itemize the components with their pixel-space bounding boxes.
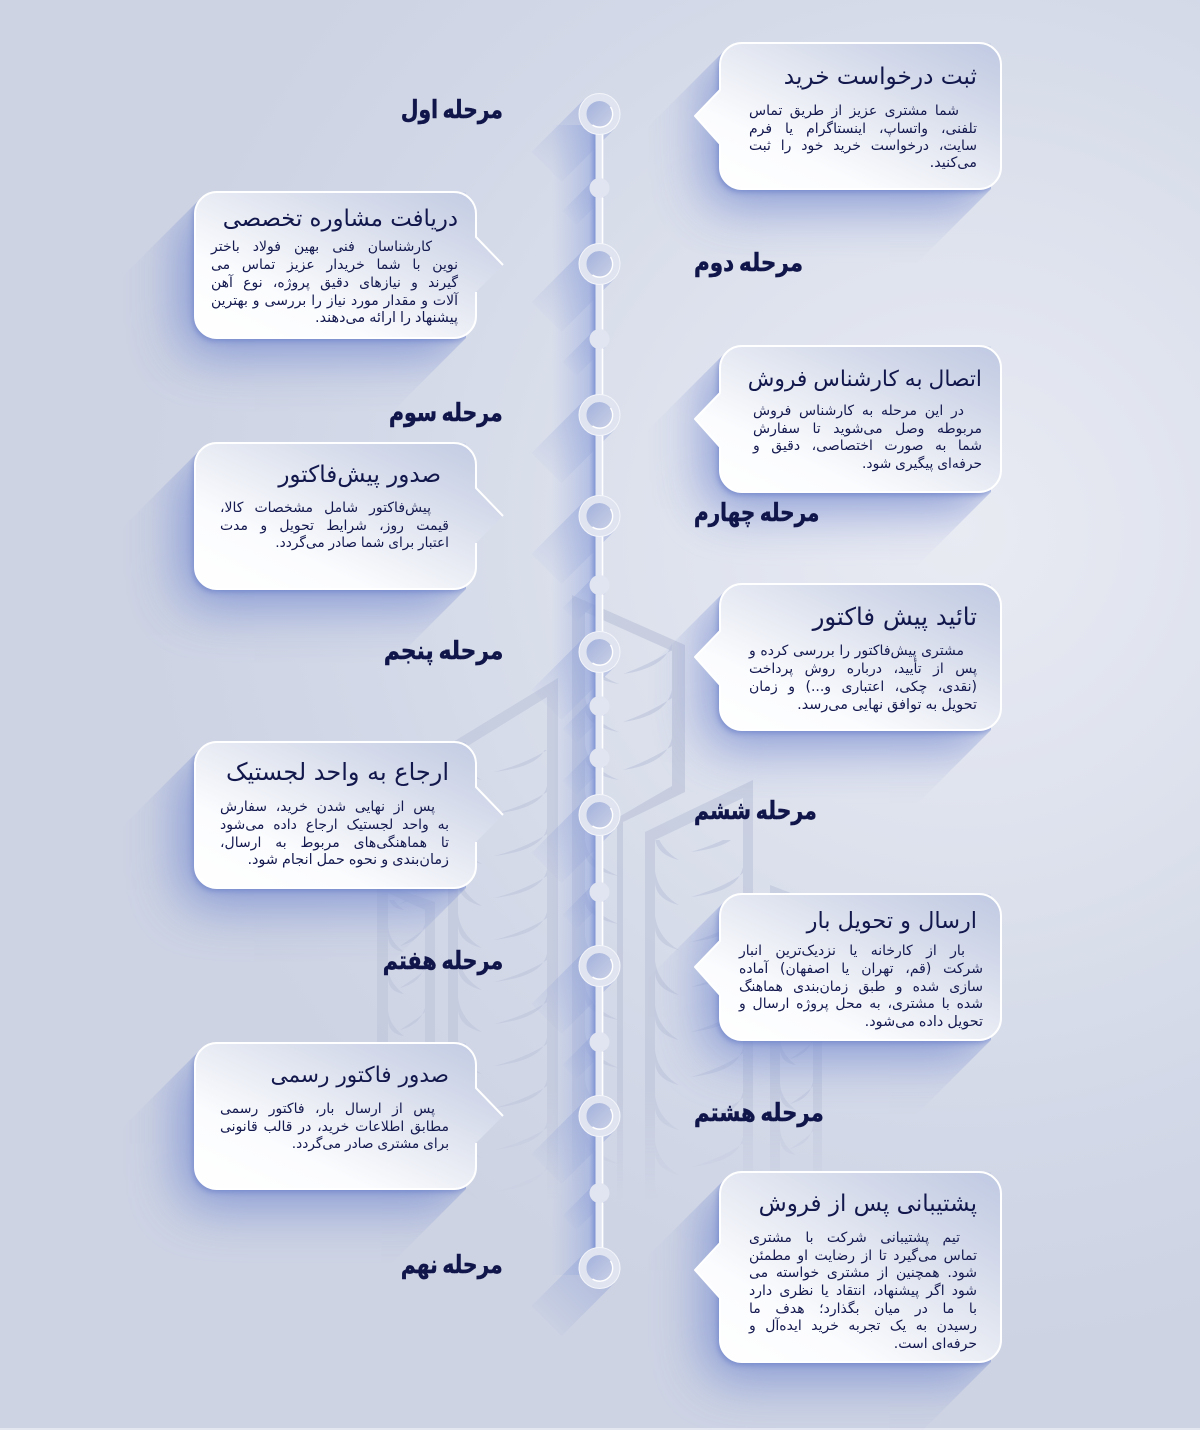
title: دریافت مشاوره تخصصی bbox=[223, 206, 458, 232]
right tower bbox=[645, 780, 753, 1130]
central tower bbox=[572, 595, 685, 1128]
card: step 8 bbox=[148, 1042, 504, 1238]
body text bbox=[748, 643, 977, 713]
body text: تا هماهنگی‌های مربوط به ارسال، bbox=[220, 835, 449, 851]
left tower bbox=[448, 678, 558, 1120]
body text: زمان‌بندی و نحوه حمل انجام شود. bbox=[247, 852, 449, 868]
body text bbox=[220, 799, 449, 868]
body text: پس از تأیید، درباره روش پرداخت bbox=[749, 661, 977, 677]
body text: اعتبار برای شما صادر می‌گردد. bbox=[275, 535, 449, 551]
body text: گیرند و نیازهای دقیق پروژه، نوع آهن bbox=[211, 275, 458, 291]
body text: تماس می‌گیرد تا از رضایت او مطمئن bbox=[749, 1248, 977, 1264]
card: step 3 bbox=[672, 345, 1002, 544]
body text: سازی شده و طبق زمان‌بندی هماهنگ bbox=[739, 979, 983, 995]
body text: پیش‌فاکتور شامل مشخصات کالا، bbox=[220, 500, 431, 516]
card: step 1 bbox=[673, 42, 1002, 238]
title: صدور فاکتور رسمی bbox=[270, 1063, 449, 1088]
body text: نوین با شما خریدار عزیز تماس می bbox=[211, 257, 458, 273]
background: faint building silhouettes bbox=[0, 595, 1200, 1430]
step label 1: مرحله اول bbox=[401, 95, 503, 124]
body text: بار از کارخانه یا نزدیک‌ترین انبار bbox=[739, 943, 965, 959]
body text: پیشنهاد را ارائه می‌دهند. bbox=[315, 310, 458, 326]
title: ثبت درخواست خرید bbox=[784, 63, 977, 90]
body text bbox=[749, 103, 977, 171]
body text: مشتری پیش‌فاکتور را بررسی کرده و bbox=[749, 643, 964, 659]
body text: شده با مشتری، به محل پروژه ارسال و bbox=[739, 996, 983, 1012]
title: پشتیبانی پس از فروش bbox=[759, 1191, 977, 1217]
body text: به واحد لجستیک ارجاع داده می‌شود bbox=[220, 817, 449, 833]
title: صدور پیش‌فاکتور bbox=[278, 462, 441, 488]
step label 6: مرحله ششم bbox=[694, 796, 817, 825]
body text: پس از نهایی شدن خرید، سفارش bbox=[220, 799, 435, 815]
body text: حرفه‌ای پیگیری شود. bbox=[862, 456, 982, 472]
card: step 7 bbox=[673, 893, 1002, 1089]
step label 4: مرحله چهارم bbox=[694, 498, 819, 527]
body text: برای مشتری صادر می‌گردد. bbox=[292, 1136, 449, 1152]
body text: مربوطه وصل می‌شوید تا سفارش bbox=[753, 421, 982, 437]
timeline line bbox=[596, 134, 604, 1248]
timeline rings bbox=[579, 94, 620, 1288]
body text: تحویل داده می‌شود. bbox=[865, 1014, 983, 1030]
card: step 6 bbox=[148, 741, 504, 936]
body text: پس از ارسال بار، فاکتور رسمی bbox=[220, 1101, 435, 1117]
body text: تحویل به توافق نهایی می‌رسد. bbox=[797, 697, 977, 713]
body text: تلفنی، واتساپ، اینستاگرام یا فرم bbox=[749, 121, 977, 137]
body text bbox=[210, 239, 459, 326]
step label 8: مرحله هشتم bbox=[694, 1098, 824, 1127]
title: تائید پیش فاکتور bbox=[813, 602, 977, 631]
body text: شود. همچنین از مشتری خواسته می bbox=[749, 1265, 977, 1281]
body text: شما به صورت اختصاصی، دقیق و bbox=[753, 438, 982, 454]
body text: شرکت (قم، تهران یا اصفهان) آماده bbox=[739, 961, 983, 977]
step label 2: مرحله دوم bbox=[694, 248, 803, 277]
body text bbox=[220, 500, 449, 551]
title: ارسال و تحویل بار bbox=[807, 908, 977, 934]
body text: مطابق اطلاعات خرید، در قالب قانونی bbox=[220, 1119, 449, 1135]
card: step 9 bbox=[674, 1171, 1002, 1410]
step label 5: مرحله پنجم bbox=[384, 636, 503, 665]
card: step 4 bbox=[148, 442, 504, 638]
step label 9: مرحله نهم bbox=[401, 1250, 503, 1279]
card: step 5 bbox=[676, 583, 1002, 781]
card: step 2 bbox=[148, 191, 504, 386]
far left tower bbox=[377, 910, 435, 1042]
body text bbox=[748, 1230, 977, 1352]
title: اتصال به کارشناس فروش bbox=[748, 367, 982, 392]
body text: با ما در میان بگذارد؛ هدف ما bbox=[749, 1301, 977, 1317]
body text: آلات و مقدار مورد نیاز را بررسی و بهترین bbox=[211, 293, 458, 309]
title: ارجاع به واحد لجستیک bbox=[226, 758, 449, 786]
bottom edge strip bbox=[0, 1428, 1200, 1430]
step label 3: مرحله سوم bbox=[389, 398, 503, 427]
body text: در این مرحله به کارشناس فروش bbox=[753, 403, 964, 419]
body text: سایت، درخواست خرید خود را ثبت bbox=[749, 138, 977, 154]
body text: حرفه‌ای است. bbox=[894, 1336, 977, 1352]
body text: شما مشتری عزیز از طریق تماس bbox=[749, 103, 959, 119]
body text: می‌کنید. bbox=[930, 155, 977, 171]
body text: شود اگر پیشنهاد، انتقاد یا نظری دارد bbox=[749, 1283, 977, 1299]
body text bbox=[220, 1101, 449, 1152]
body text: رسیدن به یک تجربه خرید ایده‌آل و bbox=[749, 1318, 977, 1334]
small timeline dots bbox=[590, 178, 610, 1203]
timeline shadows bbox=[532, 99, 614, 1336]
step label 7: مرحله هفتم bbox=[382, 946, 503, 975]
body text: تیم پشتیبانی شرکت با مشتری bbox=[749, 1230, 960, 1246]
body text bbox=[752, 403, 982, 472]
body text: کارشناسان فنی بهین فولاد باختر bbox=[211, 239, 432, 255]
body text bbox=[738, 943, 983, 1030]
body text: قیمت روز، شرایط تحویل و مدت bbox=[220, 518, 449, 534]
far right tower bbox=[770, 885, 822, 1132]
body text: (نقدی، چکی، اعتباری و...) و زمان bbox=[749, 679, 977, 695]
